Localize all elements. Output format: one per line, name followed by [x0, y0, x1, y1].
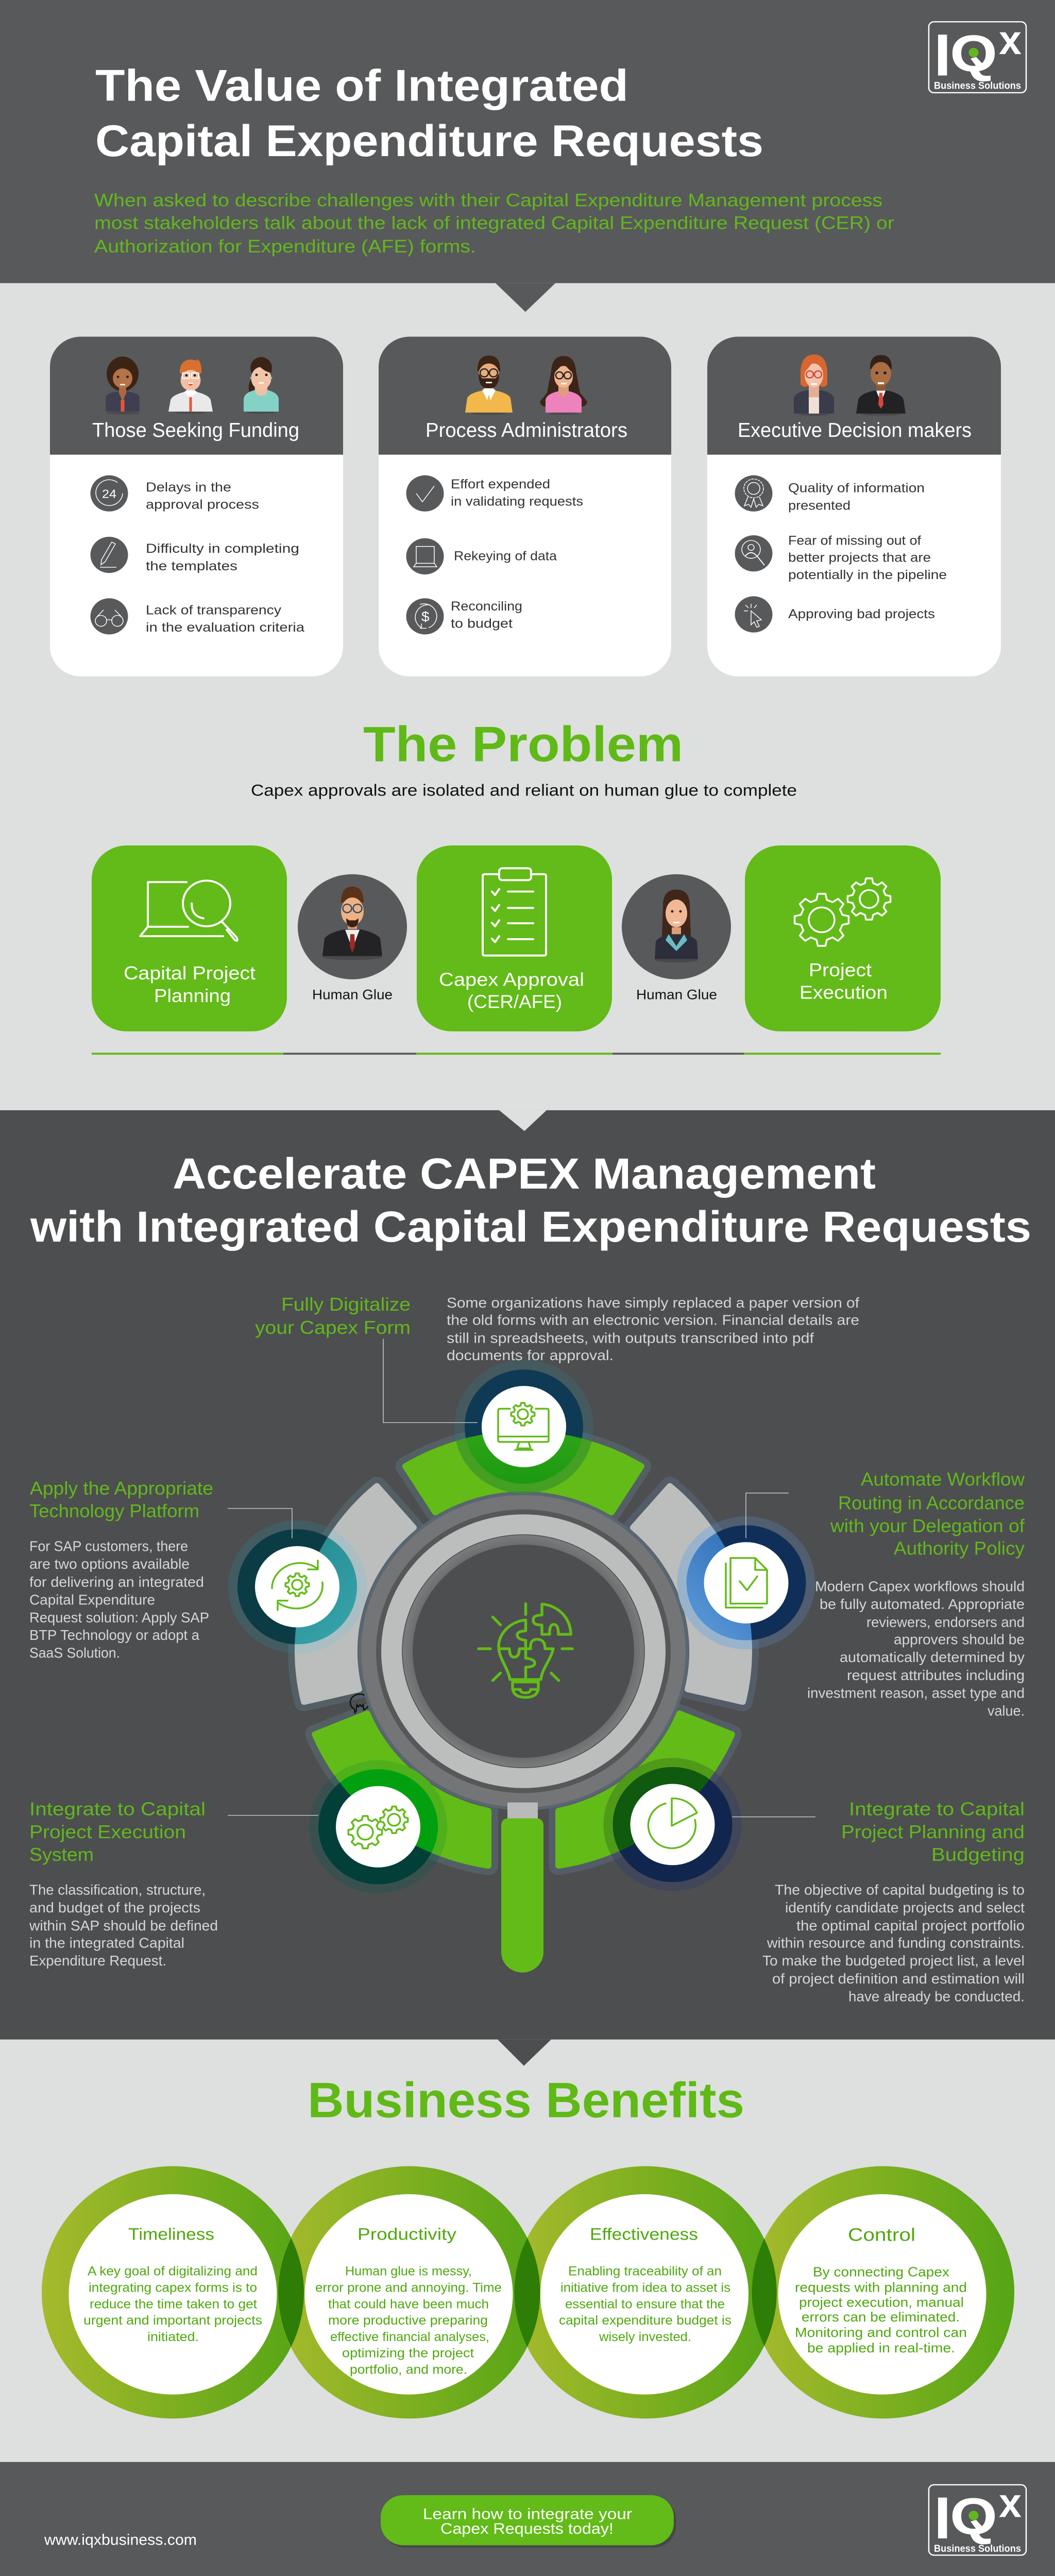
label	[124, 962, 256, 1006]
icon: glasses	[91, 598, 128, 634]
heading: Executive Decision makers	[738, 419, 972, 442]
body text: Modern Capex workflows should	[815, 1579, 1025, 1595]
magnifier diagram	[228, 1360, 815, 1973]
heading: Technology Platform	[29, 1500, 199, 1521]
avatar: human glue woman	[622, 874, 731, 979]
label: Capex Approval	[439, 969, 584, 990]
logo: IQx top	[929, 17, 1026, 93]
body text: Some organizations have simply replaced a paper version of	[447, 1295, 859, 1311]
body text: for delivering an integrated	[29, 1574, 204, 1590]
connector	[746, 1493, 789, 1538]
body text: errors can be eliminated.	[802, 2310, 960, 2325]
label	[799, 959, 888, 1003]
icon: monitor with gear	[498, 1403, 549, 1450]
body text: requests with planning and	[795, 2280, 967, 2295]
body text	[447, 1295, 859, 1364]
body text: Capital Expenditure	[29, 1592, 155, 1608]
logo: IQx top: Business Solutions	[934, 80, 1021, 91]
intro text block: Authorization for Expenditure (AFE) forms.	[94, 236, 476, 257]
body text: within SAP should be defined	[29, 1918, 218, 1934]
heading: Control	[848, 2224, 915, 2245]
connector	[228, 1815, 318, 1816]
heading: Routing in Accordance	[838, 1492, 1025, 1514]
heading: accelerate: Accelerate CAPEX Management	[173, 1150, 876, 1198]
body text: initiative from idea to asset is	[560, 2281, 730, 2295]
segment: bottom left green	[315, 1714, 488, 1866]
text: quality	[788, 481, 925, 513]
heading: business benefits: Business Benefits	[308, 2072, 744, 2128]
magnifier lens rings	[358, 1492, 689, 1810]
body text: that could have been much	[328, 2297, 489, 2311]
text: difficulty: the templates	[146, 559, 237, 573]
body text: Enabling traceability of an	[568, 2264, 722, 2279]
text: effort	[451, 477, 583, 509]
icon: check mark	[406, 476, 444, 512]
body text: integrating capex forms is to	[89, 2281, 257, 2295]
body text	[795, 2264, 967, 2355]
icon: pie chart	[648, 1799, 697, 1848]
body text: optimizing the project	[342, 2346, 474, 2360]
heading: Project Planning and	[841, 1821, 1025, 1842]
avatar: bearded man in yellow sweater	[465, 355, 513, 415]
panel: Those Seeking Funding	[50, 337, 343, 676]
node: workflow routing	[677, 1516, 815, 1649]
node: project planning	[604, 1758, 742, 1891]
body text: and budget of the projects	[29, 1900, 200, 1916]
body text: SaaS Solution.	[29, 1645, 120, 1661]
intro text block	[94, 190, 894, 257]
text: transparency	[146, 603, 305, 635]
heading	[841, 1798, 1025, 1865]
segment: right gray	[633, 1486, 749, 1702]
heading: Budgeting	[931, 1844, 1025, 1865]
panel: control	[778, 2194, 986, 2395]
body text: project execution, manual	[799, 2295, 964, 2310]
text: delays: Delays in the	[146, 480, 231, 495]
text: reconciling	[451, 599, 522, 631]
connector	[383, 1339, 478, 1422]
icon: cycle arrows with gear	[272, 1561, 322, 1610]
text: transparency: Lack of transparency	[146, 603, 281, 617]
logo: IQx footer: x	[999, 2480, 1022, 2526]
body text: be fully automated. Appropriate	[820, 1597, 1025, 1613]
heading: accelerate	[30, 1150, 1031, 1251]
text: reconciling: Reconciling	[451, 599, 522, 614]
logo: IQx footer: Q	[950, 2488, 997, 2546]
body text	[762, 1882, 1025, 2005]
icon: pencil	[91, 537, 128, 573]
panel: productivity	[305, 2194, 513, 2395]
heading: Integrate to Capital	[849, 1798, 1025, 1819]
magnifier handle	[501, 1803, 543, 1973]
panel: effectiveness	[540, 2194, 748, 2395]
body text: By connecting Capex	[813, 2264, 949, 2280]
icon: award badge	[735, 476, 773, 512]
title: The Value of Integrated	[95, 60, 628, 110]
panel: Capex Approval	[417, 845, 612, 1031]
logo: IQx footer: I	[934, 2484, 951, 2551]
avatar: woman in dark jacket	[106, 357, 140, 415]
body text: initiated.	[147, 2330, 199, 2344]
heading: Apply the Appropriate	[30, 1478, 213, 1499]
text: approving: Approving bad projects	[788, 607, 935, 621]
text: rekeying: Rekeying of data	[454, 549, 557, 563]
heading: Productivity	[358, 2225, 456, 2244]
icon: cursor click	[735, 596, 773, 633]
button: call to action: Capex Requests today!	[440, 2520, 614, 2537]
segment: top green	[405, 1434, 641, 1513]
logo: IQx footer: Business Solutions	[934, 2543, 1021, 2554]
panel: timeliness	[69, 2194, 277, 2395]
icon: 24 hours: 24	[102, 487, 116, 500]
body text	[559, 2264, 731, 2344]
heading	[29, 1478, 213, 1521]
heading: Project Execution	[29, 1821, 186, 1842]
body text: the old forms with an electronic version. Financial details are	[447, 1312, 859, 1329]
body text: The classification, structure,	[29, 1882, 206, 1898]
callout: project planning	[732, 1798, 1025, 2005]
heading: Those Seeking Funding	[92, 419, 299, 442]
connector	[228, 1509, 292, 1538]
heading: Timeliness	[128, 2225, 214, 2244]
label: Project	[809, 959, 872, 980]
body text: value.	[988, 1703, 1025, 1719]
segment: left gray	[298, 1486, 414, 1702]
panel: Executive Decision makers	[707, 337, 1001, 676]
body text	[315, 2264, 502, 2377]
heading: System	[29, 1844, 94, 1865]
body text: are two options available	[29, 1556, 190, 1572]
heading: with your Delegation of	[830, 1515, 1025, 1536]
body text: of project definition and estimation will	[772, 1971, 1025, 1987]
body text: within resource and funding constraints.	[767, 1935, 1025, 1951]
body text: documents for approval.	[447, 1348, 614, 1364]
heading	[255, 1293, 411, 1338]
panel: footer band	[0, 2462, 1055, 2576]
button: call to action: Learn how to integrate your	[423, 2505, 632, 2522]
body text: For SAP customers, there	[29, 1538, 188, 1554]
body text: effective financial analyses,	[330, 2330, 489, 2344]
body text: urgent and important projects	[83, 2313, 262, 2328]
icon: dollar cycle	[406, 598, 444, 634]
logo: IQx top: x	[999, 17, 1022, 63]
text: delays: approval process	[146, 498, 259, 512]
body text: approvers should be	[894, 1632, 1025, 1648]
text: effort: Effort expended	[451, 477, 550, 492]
text: effort: in validating requests	[451, 495, 583, 509]
heading: Fully Digitalize	[281, 1293, 411, 1315]
title	[95, 60, 763, 166]
body text: The objective of capital budgeting is to	[775, 1882, 1025, 1898]
body text: be applied in real-time.	[807, 2340, 955, 2355]
text: difficulty: Difficulty in completing	[146, 542, 299, 556]
body text: BTP Technology or adopt a	[29, 1627, 199, 1643]
body text: To make the budgeted project list, a level	[762, 1953, 1025, 1969]
panel: header band	[0, 0, 1055, 312]
heading: Authority Policy	[894, 1537, 1025, 1558]
heading	[29, 1798, 206, 1865]
body text: Human glue is messy,	[345, 2264, 472, 2279]
icon: documents with check	[726, 1558, 767, 1607]
body text: more productive preparing	[328, 2313, 488, 2328]
avatar: man in black suit	[856, 355, 906, 416]
callout: project execution	[29, 1798, 318, 1969]
icon: laptop with magnifier	[140, 880, 237, 941]
body text: investment reason, asset type and	[807, 1685, 1025, 1701]
heading: Integrate to Capital	[29, 1798, 206, 1819]
body text	[29, 1882, 218, 1969]
body text	[29, 1538, 209, 1661]
body text: the optimal capital project portfolio	[796, 1918, 1025, 1934]
node: project execution	[309, 1760, 447, 1893]
icon: gears	[348, 1807, 408, 1849]
body text: identify candidate projects and select	[785, 1900, 1025, 1916]
text: fear of missing out: better projects that are	[788, 551, 931, 565]
arrow: section pointer	[498, 2040, 551, 2066]
body text: portfolio, and more.	[350, 2363, 467, 2377]
label: human glue: Human Glue	[636, 987, 717, 1002]
node: technology platform	[228, 1520, 366, 1653]
text: transparency: in the evaluation criteria	[146, 621, 305, 635]
body text: automatically determined by	[840, 1650, 1025, 1666]
text: delays	[146, 480, 259, 512]
node: digitalize	[454, 1360, 593, 1494]
icon: 24 hours	[91, 476, 128, 512]
avatar: human glue man	[298, 874, 407, 979]
icon: person magnifier	[735, 535, 773, 571]
body text: Expenditure Request.	[29, 1953, 166, 1969]
body text	[807, 1579, 1025, 1719]
avatar: woman in pink blouse	[540, 356, 587, 415]
avatar: woman with red glasses	[794, 354, 834, 416]
panel: accelerate section	[0, 1110, 1055, 2040]
title: Capital Expenditure Requests	[95, 116, 763, 166]
icon: laptop	[406, 538, 444, 574]
icon: dollar cycle: $	[421, 608, 430, 624]
text: fear of missing out	[788, 534, 947, 582]
segment: bottom right green	[558, 1714, 732, 1866]
body text: A key goal of digitalizing and	[88, 2264, 258, 2279]
heading	[830, 1468, 1025, 1558]
text: difficulty	[146, 542, 299, 573]
body text: request attributes including	[847, 1667, 1025, 1684]
label: Capital Project	[124, 962, 256, 984]
panel: Project Execution	[745, 845, 941, 1031]
body text: wisely invested.	[599, 2330, 691, 2344]
panel: Process Administrators	[379, 337, 671, 676]
intro text block: most stakeholders talk about the lack of integrated Capital Expenditure Request (CER) or	[94, 212, 894, 233]
body text: in the integrated Capital	[29, 1935, 184, 1951]
panel: Capital Project Planning	[92, 845, 287, 1031]
subheading: problem statement: Capex approvals are isolated and reliant on human glue to complete	[251, 781, 797, 800]
heading: Process Administrators	[426, 419, 627, 442]
callout: workflow routing	[746, 1468, 1025, 1719]
body text: still in spreadsheets, with outputs transcribed into pdf	[447, 1330, 814, 1346]
body text: reviewers, endorsers and	[866, 1614, 1025, 1631]
icon: stray bulb	[350, 1694, 369, 1714]
label: Planning	[154, 985, 231, 1006]
text: fear of missing out: Fear of missing out of	[788, 534, 922, 548]
label: (CER/AFE)	[467, 991, 562, 1012]
timeline line	[92, 1053, 941, 1055]
callout: technology platform	[29, 1478, 292, 1661]
heading: Automate Workflow	[861, 1468, 1025, 1489]
intro text block: When asked to describe challenges with their Capital Expenditure Management process	[94, 190, 882, 210]
body text: have already be conducted.	[848, 1989, 1025, 2005]
body text: Monitoring and control can	[795, 2325, 967, 2340]
benefit rings	[42, 2166, 1014, 2418]
text: quality: presented	[788, 499, 850, 513]
body text	[83, 2264, 262, 2344]
avatar: woman in teal top	[244, 357, 279, 414]
icon: clipboard checklist	[483, 868, 546, 956]
text: fear of missing out: potentially in the pipeline	[788, 568, 947, 582]
text: quality: Quality of information	[788, 481, 925, 496]
icon: puzzle light bulb	[479, 1604, 572, 1698]
button: call to action	[381, 2495, 676, 2548]
body text: reduce the time taken to get	[90, 2297, 257, 2311]
body text: essential to ensure that the	[565, 2297, 725, 2311]
label: human glue: Human Glue	[312, 987, 393, 1002]
body text: Request solution: Apply SAP	[29, 1610, 209, 1626]
avatar: man in white shirt	[168, 359, 213, 414]
body text: capital expenditure budget is	[559, 2313, 731, 2328]
connector	[732, 1816, 815, 1817]
heading: accelerate: with Integrated Capital Expenditure Requests	[30, 1202, 1031, 1251]
body text: error prone and annoying. Time	[315, 2281, 502, 2295]
icon: gears	[795, 878, 891, 946]
heading: your Capex Form	[255, 1317, 411, 1338]
text: reconciling: to budget	[451, 617, 513, 631]
text: website: www.iqxbusiness.com	[44, 2531, 197, 2548]
label: Execution	[799, 981, 888, 1003]
logo: IQx footer	[929, 2480, 1026, 2555]
label	[439, 969, 584, 1012]
logo: IQx top: Q	[950, 25, 997, 82]
callout: fully digitalize	[255, 1293, 859, 1422]
logo: IQx top: I	[934, 21, 951, 88]
heading: The Problem: The Problem	[363, 716, 683, 772]
heading: Effectiveness	[590, 2225, 698, 2244]
